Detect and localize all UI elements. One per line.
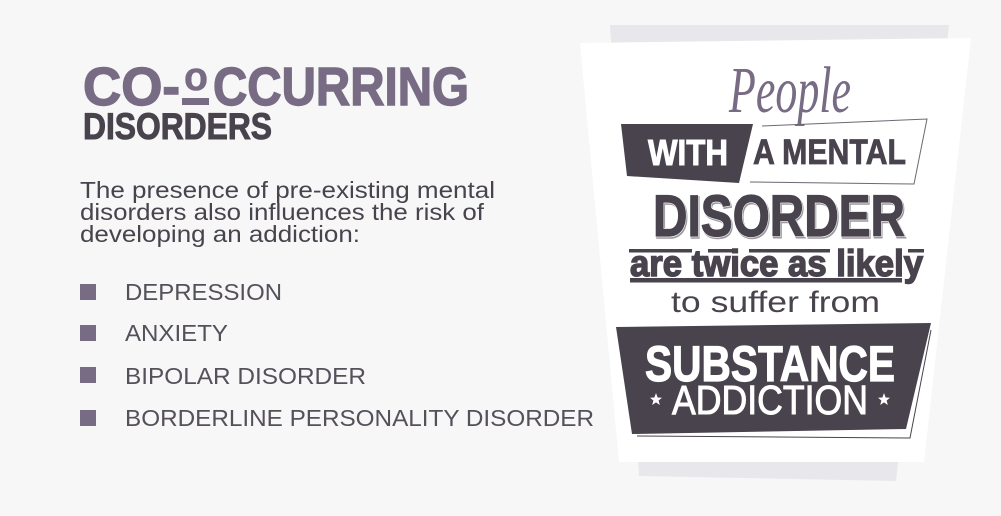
title: CCURRING [213, 57, 469, 117]
banner: substance addiction: SUBSTANCE [645, 336, 895, 392]
card shadow [610, 25, 949, 481]
title: CO- [83, 57, 180, 117]
outlined banner: a mental [750, 119, 927, 184]
word: disorder: DISORDER [654, 186, 906, 250]
title: o [184, 55, 208, 99]
banner: with [621, 124, 753, 183]
intro paragraph [80, 177, 495, 247]
list of disorders [80, 279, 594, 431]
outlined banner: a mental: A MENTAL [753, 133, 906, 172]
title [83, 55, 469, 117]
line: are twice as likely: are twice as likely [630, 243, 923, 284]
icon: star right [878, 393, 890, 405]
banner: with: WITH [648, 132, 728, 173]
intro paragraph: disorders also influences the risk of [80, 199, 485, 225]
item: anxiety [80, 320, 228, 346]
line: to suffer from: to suffer from [671, 286, 880, 319]
item: bipolar disorder: BIPOLAR DISORDER [125, 363, 366, 389]
intro paragraph: developing an addiction: [80, 221, 360, 247]
icon: star left [650, 393, 662, 405]
banner: substance addiction: ADDICTION [672, 377, 868, 423]
word: disorder: DISORDER [653, 184, 905, 249]
item: borderline personality disorder: BORDERLINE PERSONALITY DISORDER [125, 405, 594, 431]
subtitle: DISORDERS [83, 106, 272, 147]
item: depression: DEPRESSION [125, 279, 282, 305]
panel: quote card [580, 25, 971, 481]
script word: People: People [728, 54, 851, 127]
item: anxiety: ANXIETY [125, 320, 228, 346]
banner: substance addiction [616, 323, 931, 438]
word: disorder: DISORDER [653, 184, 905, 249]
card [580, 38, 971, 462]
intro paragraph: The presence of pre-existing mental [80, 177, 495, 203]
